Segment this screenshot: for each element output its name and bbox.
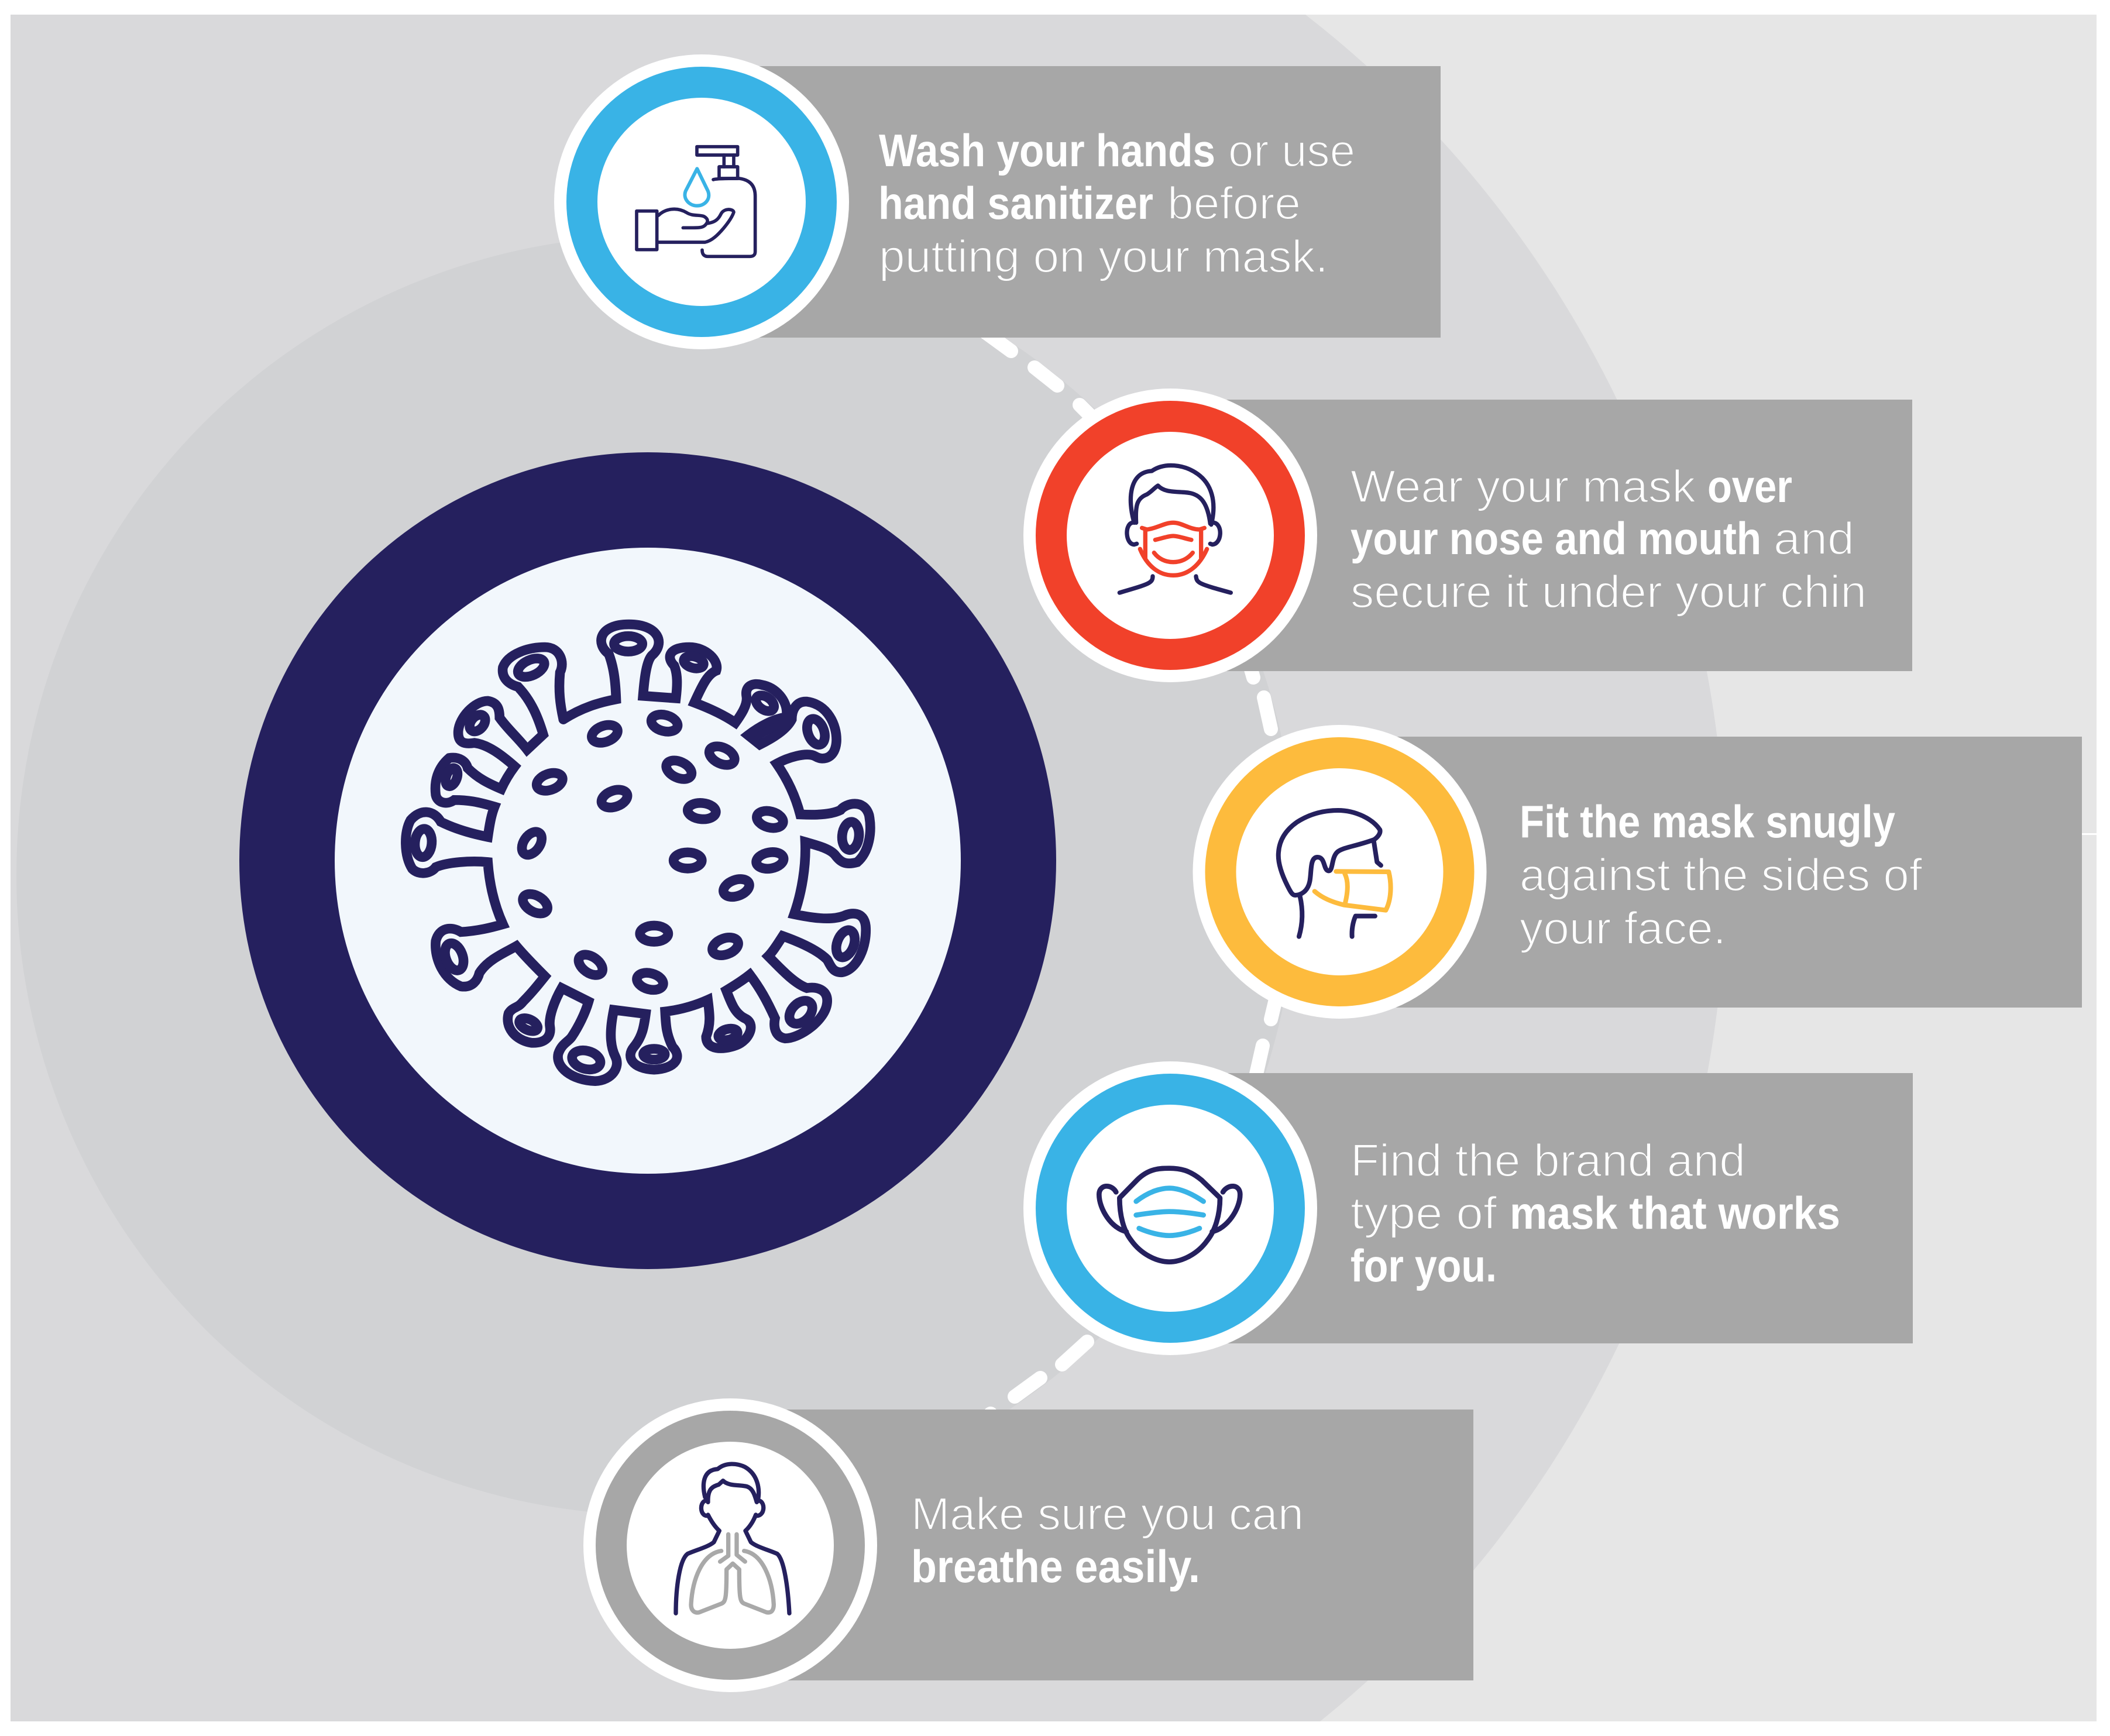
badge 1: [554, 54, 849, 349]
text block 5: Make sure you can: [911, 1488, 1304, 1539]
icon: coronavirus: [405, 624, 870, 1081]
text block 1: putting on your mask.: [879, 231, 1328, 282]
dashed connector path: [983, 331, 1277, 1421]
text block 5: [911, 1488, 1304, 1592]
text block 5: breathe easily.: [911, 1541, 1200, 1592]
text block 3: your face.: [1520, 902, 1726, 954]
panel: step 1 wash hands: [554, 54, 1441, 349]
icon: head in profile with mask: [1279, 810, 1391, 937]
badge 4: [1023, 1061, 1317, 1355]
card 1: [702, 66, 1441, 338]
panel: step 2 wear mask: [1023, 389, 1912, 682]
card 4: [1170, 1073, 1913, 1343]
icon: soap dispenser and hand: [637, 147, 755, 256]
text block 2: Wear your mask: [1350, 460, 1696, 512]
panel: step 3 fit snugly: [1193, 725, 2082, 1019]
text block 2: over: [1707, 460, 1792, 512]
text block 3: [1520, 796, 1922, 954]
text block 4: Find the brand and: [1350, 1135, 1745, 1186]
text block 1: [878, 125, 1355, 282]
text block 2: secure it under your chin: [1350, 566, 1867, 617]
badge 3: [1193, 725, 1486, 1019]
text block 2: your nose and mouth: [1350, 513, 1761, 564]
icon: face with mask, front: [1119, 465, 1231, 593]
text block 1: Wash your hands: [879, 125, 1215, 176]
badge 5: [583, 1398, 877, 1692]
text block 4: [1350, 1135, 1840, 1291]
central virus badge: [239, 452, 1056, 1269]
panel: step 4 find mask: [1023, 1061, 1913, 1355]
text block 2: [1350, 460, 1867, 617]
text block 4: mask that works: [1510, 1187, 1840, 1239]
card 5: [730, 1410, 1473, 1680]
icon: surgical mask: [1099, 1168, 1240, 1262]
text block 3: Fit the mask snugly: [1520, 796, 1895, 847]
card 2: [1170, 400, 1912, 671]
text block 1: before: [1167, 177, 1301, 229]
icon: person with lungs: [676, 1464, 789, 1613]
text block 1: hand sanitizer: [878, 177, 1153, 229]
text block 4: type of: [1350, 1187, 1497, 1239]
text block 1: or use: [1228, 125, 1355, 176]
text block 2: and: [1774, 513, 1854, 564]
card 3: [1340, 737, 2082, 1008]
text block 3: against the sides of: [1520, 849, 1922, 900]
panel: step 5 breathe easily: [583, 1398, 1473, 1692]
text block 4: for you.: [1350, 1240, 1497, 1291]
badge 2: [1023, 389, 1317, 682]
